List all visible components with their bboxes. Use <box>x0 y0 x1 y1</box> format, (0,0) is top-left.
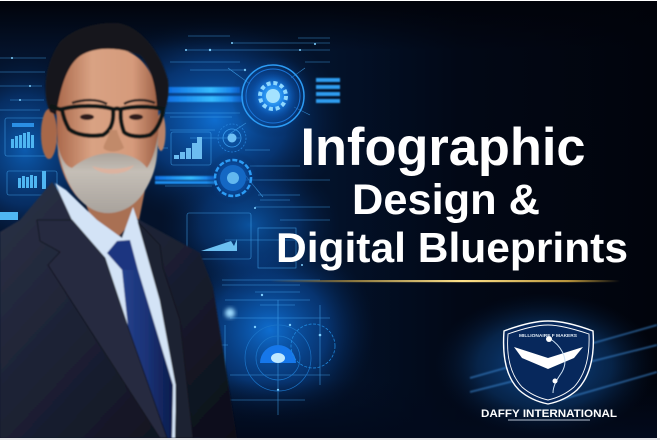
eyebrows <box>72 100 155 104</box>
shirt <box>55 183 176 438</box>
left bar chart icons <box>0 123 46 220</box>
neck <box>70 165 150 240</box>
face <box>56 47 158 213</box>
blueprint data dots <box>11 42 321 391</box>
orbit emblem <box>549 338 565 393</box>
gold divider <box>270 280 620 282</box>
frame edges <box>0 438 660 440</box>
title line 2: Design & <box>352 176 540 224</box>
radar dial <box>245 324 335 391</box>
logo light streaks <box>470 325 657 400</box>
right ear <box>156 113 166 151</box>
title line 3: Digital Blueprints <box>276 224 628 271</box>
left ear <box>41 109 57 159</box>
small dial <box>218 124 246 152</box>
digital blueprint circuitry <box>0 36 330 415</box>
large tech gear dial <box>231 54 315 138</box>
title line 1: Infographic <box>300 118 586 177</box>
hair <box>45 23 169 115</box>
wings <box>514 347 583 369</box>
glowing node <box>225 308 235 318</box>
smile <box>92 165 134 174</box>
left lapel <box>37 220 167 438</box>
company name: DAFFY INTERNATIONAL <box>481 408 617 420</box>
jacket <box>0 182 237 438</box>
nose <box>104 130 124 152</box>
portrait <box>0 23 237 438</box>
logo arc text: MILLIONAIRE F MAKERS <box>519 333 577 338</box>
fingerprint dial <box>206 151 260 205</box>
tie <box>107 240 173 438</box>
title <box>276 118 628 271</box>
logo underline <box>508 420 590 421</box>
stair bar chart icon <box>174 137 202 159</box>
right lapel <box>138 222 193 438</box>
eyes <box>80 114 143 120</box>
glasses <box>50 106 163 136</box>
area chart icon <box>201 239 237 251</box>
shield logo <box>504 321 593 404</box>
logo glow <box>433 293 657 437</box>
beard <box>55 130 158 213</box>
glowing horizontal bars <box>155 78 340 184</box>
